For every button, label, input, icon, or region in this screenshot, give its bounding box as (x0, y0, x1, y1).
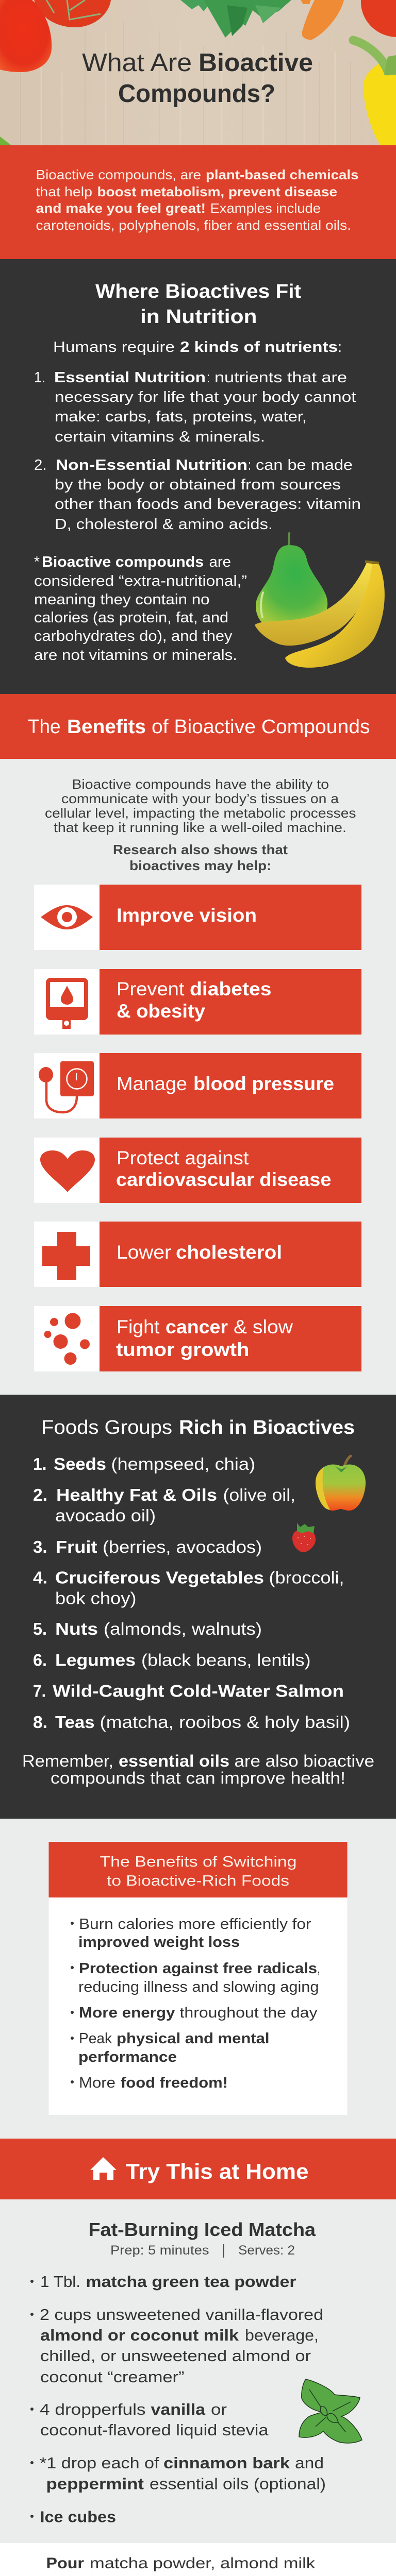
text block: essential oils reminder: are also bioactive (234, 1752, 374, 1770)
list: benefits: throughout the day (179, 2005, 318, 2021)
list item 6 (33, 1651, 310, 1669)
heading (28, 716, 370, 738)
list item 8: Teas (55, 1713, 95, 1732)
list item 8: (matcha, rooibos & holy basil) (100, 1713, 350, 1732)
icon: red pepper (0, 0, 52, 72)
heading: of Bioactive Compounds (152, 716, 370, 738)
text block: non-essential nutrition: Non-Essential Nutrition (56, 457, 248, 473)
text block: essential oils reminder: essential oils (119, 1752, 229, 1770)
list item 7: 7. (33, 1682, 46, 1700)
text block: bioactive compounds note: carbohydrates do), and they (34, 628, 233, 645)
text block: essential nutrition: certain vitamins & minerals. (55, 429, 265, 445)
recipe meta: Prep: 5 minutes (110, 2243, 209, 2258)
card: protect against cardiovascular disease: cardiovascular disease (116, 1169, 331, 1190)
list item 2: (olive oil, (223, 1485, 295, 1504)
text block: bioactive compounds note: considered “extra-nutritional,” (34, 573, 247, 589)
icon: blood pressure cuff (39, 1061, 94, 1112)
icon: eye (41, 905, 93, 929)
text block: two kinds: Humans require (53, 339, 175, 355)
text block: two kinds: : (338, 339, 342, 355)
ingredient: essential oils: and (295, 2454, 324, 2472)
list item 4: 4. (33, 1568, 47, 1587)
list item 7: Wild-Caught Cold-Water Salmon (53, 1682, 344, 1700)
ingredient: stevia: or (211, 2400, 227, 2418)
icon: tomato top (34, 0, 111, 27)
heading (41, 1417, 355, 1438)
text block: two kinds (53, 339, 342, 355)
list: benefits: More energy (79, 2005, 175, 2021)
icon: parsley (180, 0, 291, 38)
list: benefits: improved weight loss (78, 1934, 240, 1951)
card: protect against cardiovascular disease (34, 1138, 361, 1203)
ingredient: matcha: matcha green tea powder (86, 2273, 296, 2291)
list item 2 (33, 1485, 295, 1525)
text block: essential oils reminder: Remember, (22, 1752, 113, 1770)
heading (100, 1854, 297, 1889)
text block: non-essential nutrition: by the body or obtained from sources (55, 477, 341, 493)
banner: try this at home: Try This at Home (126, 2159, 308, 2183)
text block: intro paragraph (45, 776, 356, 835)
ingredient: stevia (30, 2400, 269, 2439)
header panel: wood background with vegetables (0, 0, 396, 145)
list: benefits: , (317, 1960, 320, 1977)
list item 3: 3. (33, 1537, 47, 1556)
text block: essential nutrition: 1. (34, 369, 45, 386)
text block: definition: boost metabolism, prevent disease (97, 184, 337, 199)
heading: The Benefits of Switching (100, 1854, 297, 1870)
ingredient: stevia: 4 dropperfuls (40, 2400, 145, 2418)
title: Compounds? (118, 80, 275, 108)
ingredient: milk: 2 cups unsweetened vanilla-flavored (40, 2306, 323, 2324)
text block: bioactive compounds note (34, 554, 247, 664)
card: prevent diabetes: Prevent (117, 978, 185, 999)
recipe meta: Serves: 2 (238, 2243, 295, 2258)
panel: benefits list (0, 759, 396, 1395)
card: fight cancer: Fight (117, 1316, 160, 1337)
text block: intro paragraph: that keep it running like a well-oiled machine. (54, 820, 346, 835)
text block: definition (36, 167, 359, 233)
text block: bioactive compounds note: Bioactive compounds (42, 554, 204, 570)
recipe title (89, 2219, 316, 2258)
ingredient: milk: almond or coconut milk (40, 2326, 239, 2344)
icon: carrot (301, 0, 344, 40)
heading: Rich in Bioactives (179, 1417, 355, 1438)
icon: pear and bananas (255, 533, 385, 668)
text block: definition: Examples include (210, 200, 321, 216)
text block: essential nutrition: Essential Nutrition (54, 369, 206, 386)
ingredient: stevia: vanilla (151, 2400, 206, 2418)
panel: where bioactives fit in nutrition (0, 259, 396, 694)
ingredient: milk (30, 2306, 323, 2386)
text block: bioactive compounds note: meaning they contain no (34, 591, 210, 608)
ingredient: essential oils: *1 drop each of (40, 2454, 159, 2472)
title: What Are (82, 49, 192, 77)
text block: definition: Bioactive compounds, are (36, 167, 201, 182)
text block: essential nutrition: nutrients that are (214, 369, 347, 386)
text block: non-essential nutrition: 2. (34, 457, 46, 473)
list: benefits: More (79, 2075, 116, 2091)
text block: definition: and make you feel great! (36, 200, 206, 216)
text block: essential nutrition: : (207, 369, 210, 386)
text block: non-essential nutrition: can be made (256, 457, 353, 473)
text block: bioactive compounds note: are (209, 554, 231, 570)
icon: cross (42, 1232, 90, 1280)
icon: tomato right (361, 0, 396, 37)
text block: research lead-in: Research also shows that (113, 842, 288, 857)
list item 1: 1. (33, 1454, 46, 1473)
heading: in Nutrition (140, 306, 257, 328)
list: benefits: Burn calories more efficiently for (79, 1916, 311, 1933)
card: lower cholesterol (34, 1222, 361, 1287)
heading: The (28, 716, 61, 738)
ingredient: essential oils (30, 2454, 326, 2493)
text block: directions: matcha powder, almond milk (90, 2555, 316, 2572)
list item 4 (33, 1568, 344, 1607)
panel: recipe directions (0, 2543, 396, 2576)
heading (95, 281, 301, 328)
list item 2: Healthy Fat & Oils (56, 1485, 217, 1504)
text block: directions (46, 2555, 355, 2576)
list item 8: 8. (33, 1713, 47, 1732)
card: improve vision (34, 885, 361, 950)
ingredient: ice: Ice cubes (40, 2508, 116, 2526)
card: lower cholesterol: Lower (117, 1242, 171, 1263)
text block: non-essential nutrition: : (248, 457, 251, 473)
text block: intro paragraph: Bioactive compounds have the ability to (72, 776, 329, 792)
card: manage blood pressure: Manage (117, 1073, 187, 1094)
text block: essential oils reminder (22, 1752, 374, 1787)
ingredient: essential oils: cinnamon bark (163, 2454, 290, 2472)
card: protect against cardiovascular disease: Protect against (117, 1147, 249, 1168)
text block: essential nutrition (34, 369, 356, 445)
text block: non-essential nutrition (34, 457, 361, 533)
text block: essential nutrition: make: carbs, fats, proteins, water, (55, 409, 307, 425)
card: fight cancer: & slow (234, 1316, 293, 1337)
panel: benefits heading band (0, 694, 396, 759)
text block: definition: plant-based chemicals (206, 167, 359, 182)
text block: intro paragraph: communicate with your body’s tissues on a (61, 791, 339, 806)
list item 3: (berries, avocados) (103, 1537, 262, 1556)
list item 4: (broccoli, (269, 1568, 344, 1587)
text block: research lead-in: bioactives may help: (129, 858, 271, 873)
list item 2: avocado oil) (55, 1506, 156, 1525)
panel: benefits of switching (48, 1842, 348, 2115)
text block: bioactive compounds note: * (34, 554, 40, 570)
background: light gray lower area (0, 1819, 396, 2156)
ingredient: milk: chilled, or unsweetened almond or (40, 2347, 311, 2365)
text block: non-essential nutrition: D, cholesterol & amino acids. (55, 516, 273, 533)
recipe meta (110, 2243, 295, 2258)
list item 5: Nuts (55, 1619, 98, 1638)
text block: directions: Pour (46, 2555, 84, 2572)
icon: cells (44, 1313, 90, 1365)
list: benefits: reducing illness and slowing aging (78, 1979, 319, 1995)
text block: bioactive compounds note: calories (as protein, fat, and (34, 609, 228, 626)
heading: Benefits (67, 716, 146, 738)
list item 3: Fruit (56, 1537, 97, 1556)
text block: research lead-in (113, 842, 288, 873)
list: benefits: Peak (79, 2030, 112, 2047)
card: lower cholesterol: cholesterol (176, 1242, 282, 1263)
list item 5: 5. (33, 1619, 47, 1638)
list: benefits: food freedom! (121, 2075, 228, 2091)
card: fight cancer: tumor growth (116, 1339, 250, 1360)
ingredient: matcha: 1 Tbl. (40, 2273, 80, 2291)
icon: mint leaf (299, 2379, 362, 2443)
card: manage blood pressure (34, 1053, 361, 1118)
text block: two kinds: 2 kinds of nutrients (180, 339, 338, 355)
ingredient: stevia: coconut-flavored liquid stevia (40, 2421, 269, 2439)
card: fight cancer (34, 1306, 361, 1371)
card: fight cancer: cancer (166, 1316, 228, 1337)
list: recipe ingredients (30, 2273, 326, 2526)
panel: intro definition (0, 145, 396, 260)
heading: Where Bioactives Fit (95, 281, 301, 302)
ingredient: milk: beverage, (245, 2326, 319, 2344)
text block: essential nutrition: necessary for life that your body cannot (55, 389, 356, 405)
list item 3 (33, 1537, 262, 1556)
icon: yellow pepper (353, 40, 396, 145)
text block: definition: carotenoids, polyphenols, fiber and essential oils. (36, 217, 351, 233)
card: improve vision: Improve vision (117, 905, 257, 926)
list item 1 (33, 1454, 255, 1473)
heading: to Bioactive-Rich Foods (107, 1873, 289, 1889)
list: benefits: physical and mental (117, 2030, 269, 2047)
text block: intro paragraph: cellular level, impacting the metabolic processes (45, 805, 356, 821)
recipe title: Fat-Burning Iced Matcha (89, 2219, 316, 2240)
list item 4: Cruciferous Vegetables (55, 1568, 264, 1587)
list item 6: 6. (33, 1651, 47, 1669)
ingredient: essential oils: peppermint (46, 2475, 144, 2493)
list item 2: 2. (33, 1485, 47, 1504)
list item 6: Legumes (55, 1651, 136, 1669)
list: benefits: performance (78, 2049, 177, 2065)
icon: glucose meter (46, 978, 88, 1029)
card: prevent diabetes: diabetes (190, 978, 271, 999)
list item 6: (black beans, lentils) (141, 1651, 310, 1669)
panel: foods rich in bioactives (0, 1395, 396, 1819)
list item 5: (almonds, walnuts) (104, 1619, 262, 1638)
title: Bioactive (199, 49, 313, 77)
text block: bioactive compounds note: are not vitamins or minerals. (34, 647, 237, 664)
card: manage blood pressure: blood pressure (193, 1073, 334, 1094)
icon: apple (316, 1456, 366, 1511)
icon: house (90, 2157, 117, 2180)
list: benefits (71, 1916, 320, 2091)
list: benefits: Protection against free radicals (79, 1960, 317, 1977)
list item 1: (hempseed, chia) (111, 1454, 255, 1473)
icon: heart (40, 1150, 95, 1192)
ingredient: essential oils: essential oils (optional) (150, 2475, 326, 2493)
icon: green corner leaf (0, 137, 11, 145)
text block: essential oils reminder: compounds that can improve health! (51, 1769, 345, 1787)
ingredient: milk: coconut “creamer” (40, 2368, 185, 2386)
text block: definition: that help (36, 184, 92, 199)
list item 5 (33, 1619, 262, 1638)
heading: Foods Groups (41, 1417, 172, 1438)
list item 4: bok choy) (55, 1589, 136, 1607)
title (82, 49, 313, 108)
list item 1: Seeds (54, 1454, 106, 1473)
list: food groups (33, 1454, 350, 1732)
card: prevent diabetes: & obesity (117, 1001, 205, 1022)
text block: non-essential nutrition: other than foods and beverages: vitamin (55, 496, 361, 513)
card: prevent diabetes (34, 969, 361, 1035)
banner: try this at home (0, 2139, 396, 2199)
icon: strawberry (292, 1523, 316, 1552)
